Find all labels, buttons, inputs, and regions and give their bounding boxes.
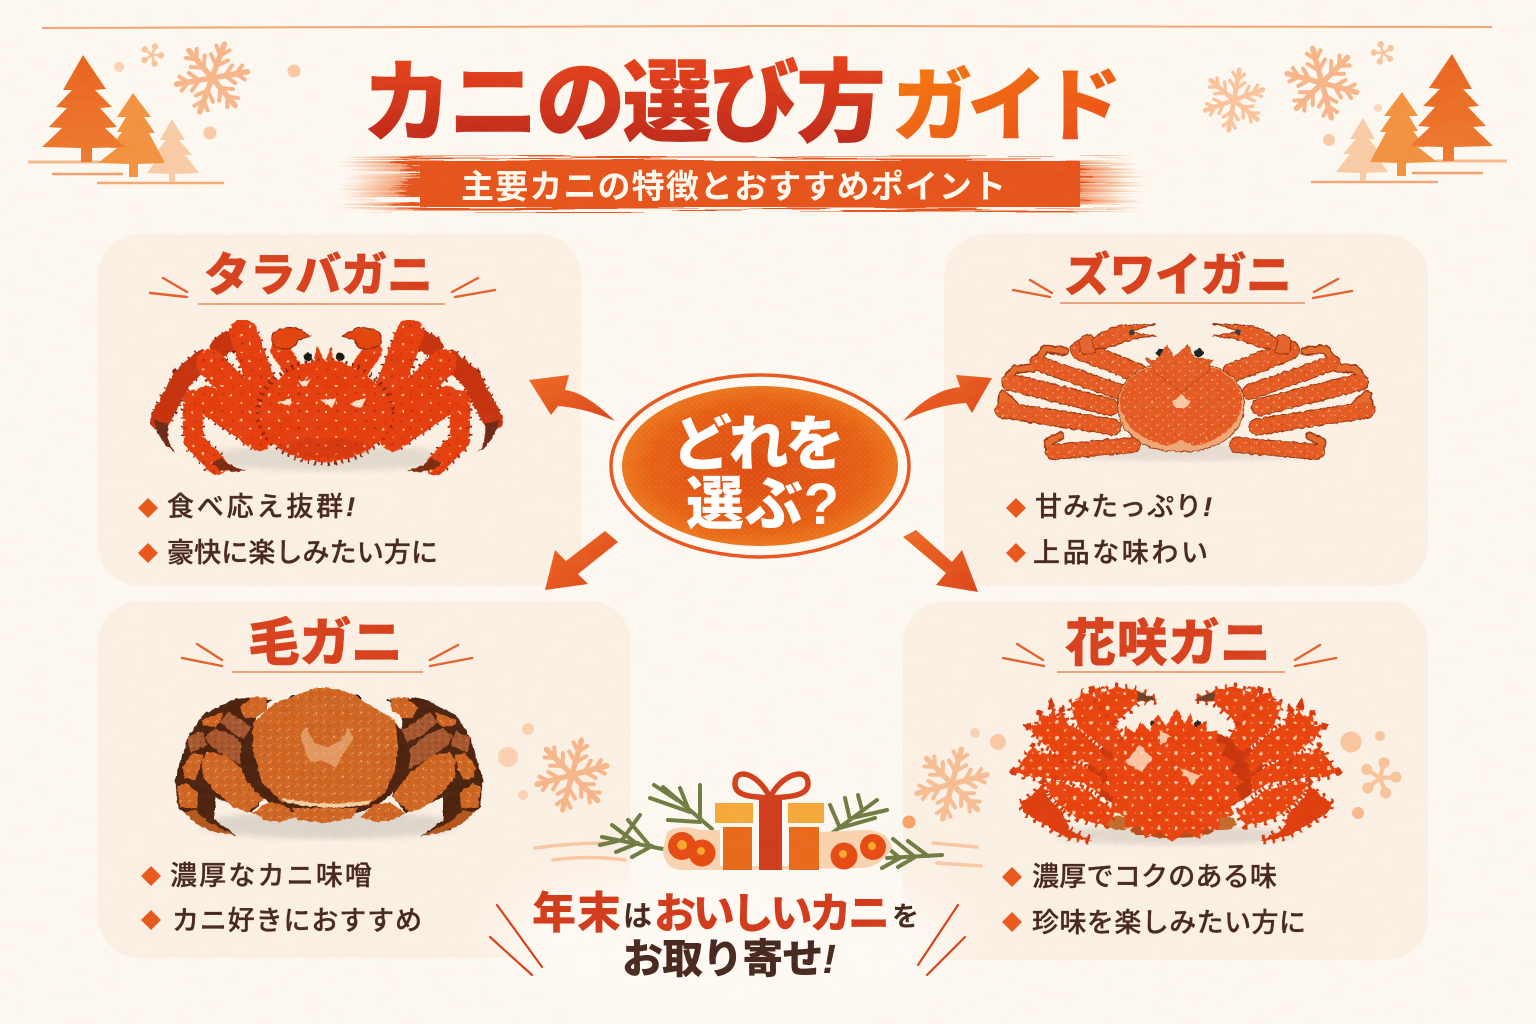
crab: タラバガニ [154, 327, 499, 472]
bottom message: お取り寄せ! [622, 936, 836, 982]
panel: タラバガニ background [98, 234, 581, 586]
decoration: snow panel 毛ガニ [498, 723, 616, 819]
panel: ズワイガニ background [944, 234, 1428, 586]
arrow: to タラバガニ [529, 375, 615, 421]
bottom message: 年末 [532, 889, 621, 938]
subtitle banner [345, 160, 1135, 208]
soft glow behind bottom message [503, 868, 953, 1012]
heading: 花咲ガニ: 花咲ガニ [1065, 615, 1271, 672]
crab: 花咲ガニ [1015, 686, 1337, 845]
decoration: snow right [1199, 39, 1397, 146]
bullets: タラバガニ: 食べ応え抜群! [167, 492, 355, 522]
heading: ズワイガニ: ズワイガニ [1064, 249, 1292, 301]
bullets: 花咲ガニ: 濃厚でコクのある味 [1032, 862, 1277, 892]
bullets: 花咲ガニ: 珍味を楽しみたい方に [1032, 908, 1306, 938]
bullets: タラバガニ [138, 492, 438, 568]
bullets: ズワイガニ: 上品な味わい [1033, 538, 1208, 568]
bullets: 花咲ガニ [1002, 862, 1306, 938]
decoration: winter trees right [1311, 54, 1507, 182]
center badge: どれを選ぶ?: どれを [672, 411, 845, 478]
bullets: 毛ガニ [141, 861, 422, 936]
center badge: どれを選ぶ?: 選ぶ? [686, 472, 839, 537]
subtitle banner: 主要カニの特徴とおすすめポイント [461, 168, 1006, 205]
panel: 花咲ガニ background [903, 601, 1428, 960]
heading: ズワイガニ [1013, 249, 1352, 303]
decoration: snow left [114, 32, 300, 140]
bullets: ズワイガニ [1006, 492, 1212, 568]
gift with pine and berries [535, 774, 981, 870]
bullets: ズワイガニ: 甘みたっぷり! [1035, 492, 1212, 522]
crab: ズワイガニ [1002, 324, 1368, 461]
bullets: 毛ガニ: 濃厚なカニ味噌 [170, 861, 372, 891]
bullets: タラバガニ: 豪快に楽しみたい方に [167, 538, 438, 568]
bottom message [490, 889, 965, 982]
heading: 毛ガニ: 毛ガニ [248, 615, 403, 673]
bottom message: おいしいカニ [654, 890, 890, 937]
heading: 毛ガニ [182, 615, 472, 673]
bottom message: を [892, 902, 919, 932]
bottom message: は [623, 901, 652, 933]
arrow: to 花咲ガニ [903, 530, 978, 592]
heading: 花咲ガニ [1003, 615, 1336, 672]
bullets: 毛ガニ: カニ好きにおすすめ [172, 906, 422, 936]
decoration: snow panel 花咲ガニ [908, 728, 1404, 828]
heading: タラバガニ: タラバガニ [204, 249, 433, 301]
title [362, 54, 1122, 154]
top decorative line [42, 26, 1492, 28]
heading: タラバガニ [150, 249, 495, 304]
title: カニの選び方 [362, 54, 886, 154]
panel: 毛ガニ background [98, 601, 631, 958]
title: ガイド [892, 62, 1122, 151]
crab: 毛ガニ [175, 688, 483, 839]
center badge: どれを選ぶ? [611, 375, 909, 557]
arrow: to 毛ガニ [545, 531, 618, 590]
decoration: winter trees left [28, 55, 224, 183]
arrow: to ズワイガニ [903, 375, 992, 421]
